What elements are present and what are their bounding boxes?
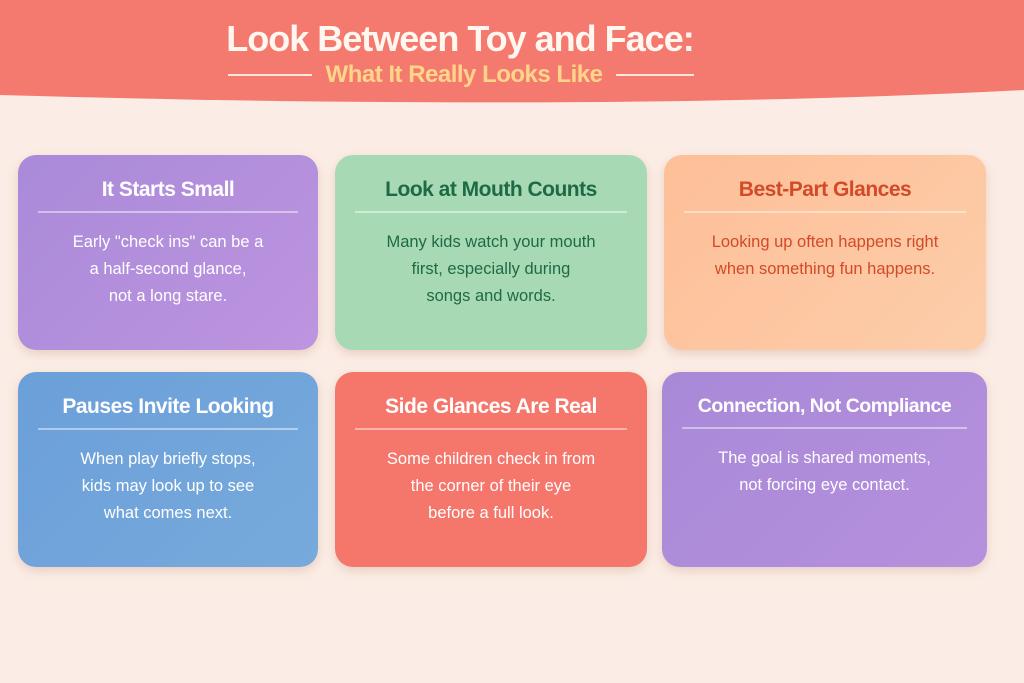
panel: it starts small: a half-second glance,: [90, 260, 246, 278]
panel: look at mouth counts: first, especially during: [412, 260, 570, 278]
panel: connection not compliance: Connection, Not Compliance: [698, 395, 951, 417]
panel: pauses invite looking: Pauses Invite Looking: [62, 395, 274, 418]
subtitle: What It Really Looks Like: [326, 61, 602, 88]
panel: it starts small: It Starts Small: [102, 178, 234, 201]
panel: pauses invite looking: what comes next.: [104, 504, 232, 522]
panel: best-part glances: Looking up often happens right: [712, 233, 938, 251]
panel: it starts small: Early "check ins" can be a: [73, 233, 263, 251]
panel: look at mouth counts: [335, 155, 647, 350]
panel: it starts small: not a long stare.: [109, 287, 227, 305]
panel: best-part glances: Best-Part Glances: [739, 178, 911, 201]
panel: it starts small: [18, 155, 318, 350]
panel: best-part glances: when something fun happens.: [715, 260, 935, 278]
panel: pauses invite looking: [18, 372, 318, 567]
header band: [0, 0, 1024, 102]
panel: side glances are real: [335, 372, 647, 567]
panel: pauses invite looking: When play briefly stops,: [80, 450, 256, 468]
panel: look at mouth counts: Look at Mouth Counts: [385, 178, 597, 201]
title: Look Between Toy and Face:: [226, 18, 694, 59]
panel: side glances are real: the corner of their eye: [411, 477, 571, 495]
panel: connection not compliance: not forcing eye contact.: [739, 476, 910, 494]
panel: side glances are real: Some children check in from: [387, 450, 595, 468]
panel: look at mouth counts: songs and words.: [426, 287, 556, 305]
panel: connection not compliance: [662, 372, 987, 567]
panel: side glances are real: Side Glances Are Real: [385, 395, 597, 418]
panel: connection not compliance: The goal is shared moments,: [718, 449, 931, 467]
panel: best-part glances: [664, 155, 986, 350]
panel: side glances are real: before a full look.: [428, 504, 554, 522]
panel: pauses invite looking: kids may look up to see: [82, 477, 254, 495]
panel: look at mouth counts: Many kids watch your mouth: [386, 233, 596, 251]
